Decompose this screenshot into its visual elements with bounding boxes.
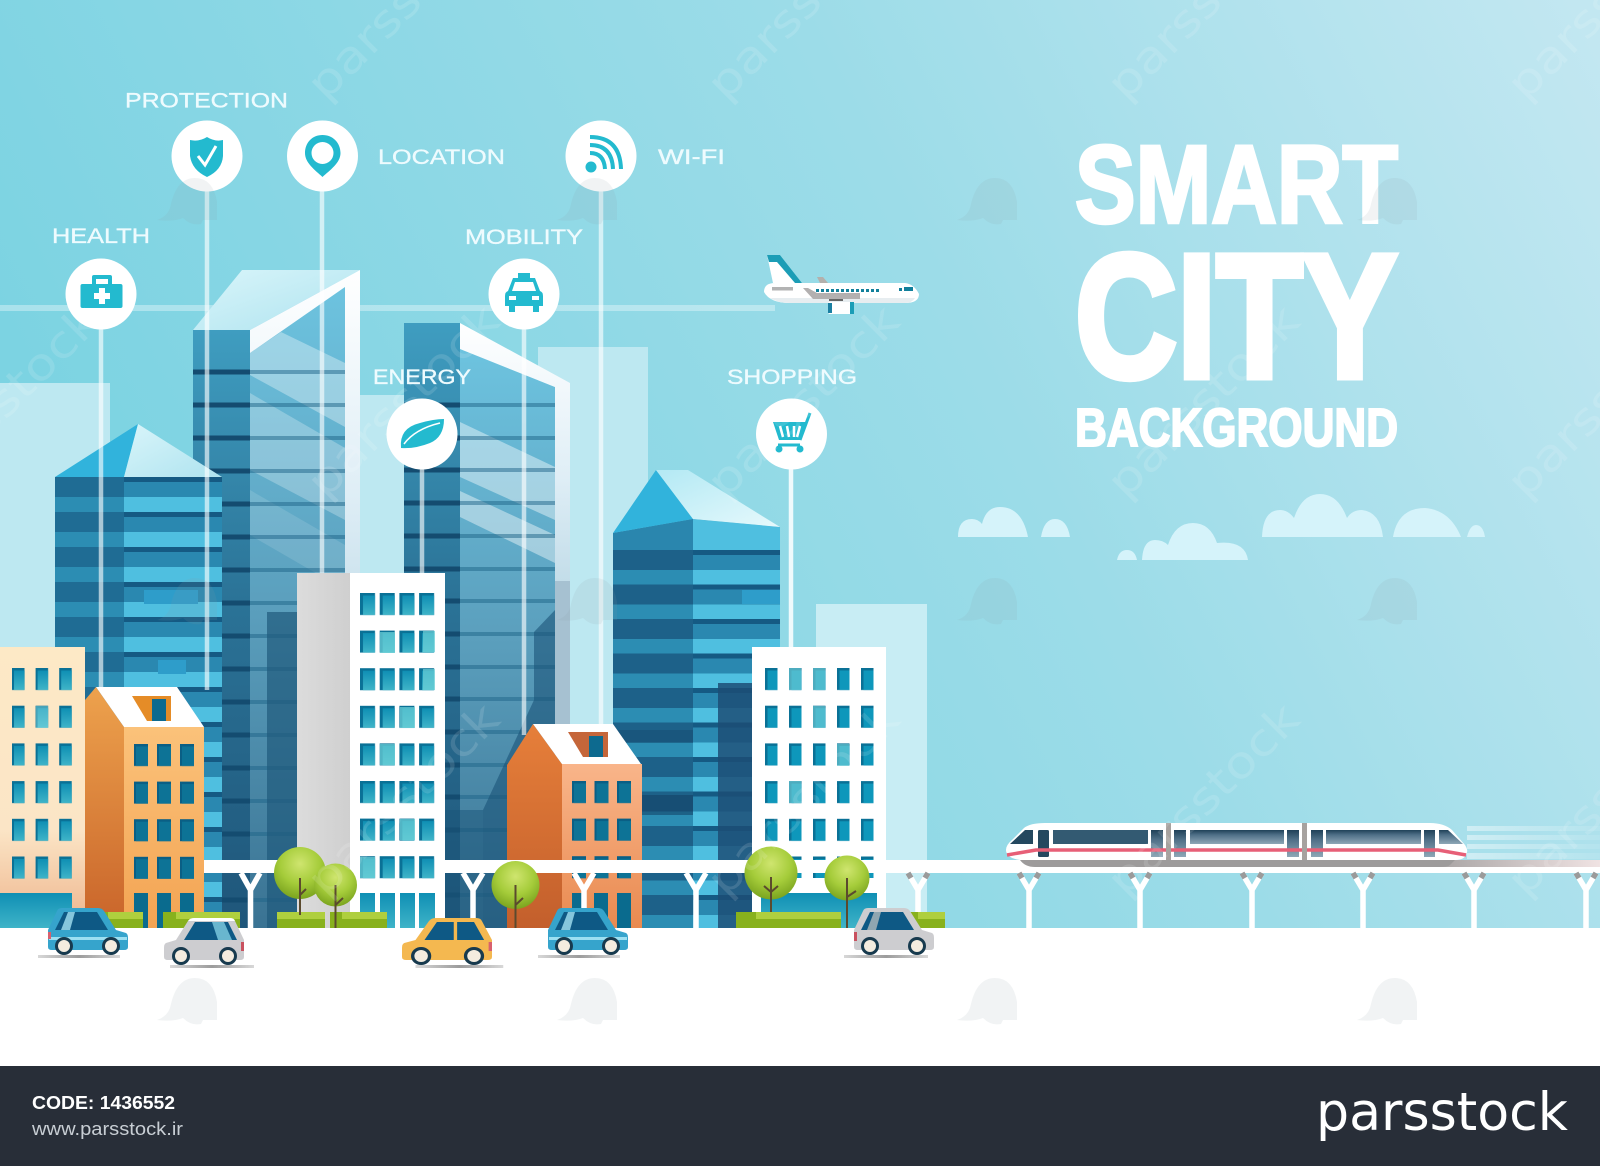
protection icon with label: PROTECTION bbox=[125, 88, 288, 112]
location icon with label bbox=[287, 120, 505, 192]
parsstock diagonal watermarks: parsstock bbox=[297, 693, 510, 906]
wi-fi icon with label bbox=[566, 120, 725, 192]
parsstock diagonal watermarks: parsstock bbox=[1097, 693, 1310, 906]
cream apartment building bbox=[0, 647, 85, 928]
title: SMART bbox=[1075, 124, 1398, 246]
elevated monorail track bbox=[204, 860, 1600, 928]
track pillars bbox=[241, 873, 1596, 928]
parsstock diagonal watermarks: parsstock bbox=[297, 295, 510, 508]
connector lines from icons to buildings bbox=[101, 185, 791, 735]
horizon line bbox=[0, 305, 775, 311]
energy icon with label bbox=[373, 365, 471, 470]
title bbox=[1075, 124, 1398, 458]
airplane bbox=[764, 255, 919, 314]
protection icon with label bbox=[125, 88, 288, 192]
yellow car bbox=[402, 918, 503, 968]
mobility icon with label bbox=[465, 225, 583, 330]
wi-fi icon with label: WI-FI bbox=[658, 145, 725, 169]
parsstock diagonal watermarks: parsstock bbox=[697, 295, 910, 508]
blue car bbox=[38, 908, 128, 958]
clouds bbox=[958, 494, 1485, 560]
blue car bbox=[538, 908, 628, 958]
footer bar bbox=[0, 1066, 1600, 1166]
elephant watermarks bbox=[157, 178, 1417, 1024]
image code: CODE: 1436552 bbox=[32, 1093, 175, 1113]
shopping icon with label: SHOPPING bbox=[727, 365, 857, 389]
tree bbox=[492, 861, 540, 928]
white office building bbox=[297, 573, 445, 928]
shopping icon with label bbox=[727, 365, 857, 470]
title: CITY bbox=[1075, 219, 1397, 415]
orange townhouse bbox=[507, 724, 642, 928]
tree bbox=[824, 856, 870, 928]
glass tower centre bbox=[404, 323, 570, 928]
sky background bbox=[0, 0, 1600, 930]
energy icon with label: ENERGY bbox=[373, 365, 471, 389]
monorail train bbox=[1006, 823, 1600, 867]
pointed tower right bbox=[613, 470, 780, 928]
location icon with label: LOCATION bbox=[378, 145, 505, 169]
parsstock diagonal watermarks: parsstock bbox=[1097, 295, 1310, 508]
white residential building bbox=[752, 647, 886, 928]
parsstock diagonal watermarks: parsstock bbox=[697, 693, 910, 906]
glass tower left bbox=[193, 270, 360, 928]
pointed tower left bbox=[55, 424, 222, 928]
parsstock diagonal watermarks bbox=[0, 0, 1600, 906]
white street ground bbox=[0, 928, 1600, 1066]
mobility icon with label: MOBILITY bbox=[465, 225, 583, 249]
tree bbox=[314, 864, 357, 928]
background pale building blocks bbox=[0, 347, 927, 928]
orange apartment building bbox=[85, 687, 204, 928]
silver car bbox=[844, 908, 934, 958]
health icon with label bbox=[52, 224, 150, 330]
website address: www.parsstock.ir bbox=[31, 1119, 183, 1139]
silver car bbox=[164, 918, 254, 968]
tree bbox=[274, 847, 326, 915]
green hedges bbox=[104, 912, 945, 928]
health icon with label: HEALTH bbox=[52, 224, 150, 248]
tree bbox=[744, 846, 798, 912]
title: BACKGROUND bbox=[1075, 398, 1398, 458]
parsstock logo: parsstock bbox=[1316, 1082, 1568, 1143]
